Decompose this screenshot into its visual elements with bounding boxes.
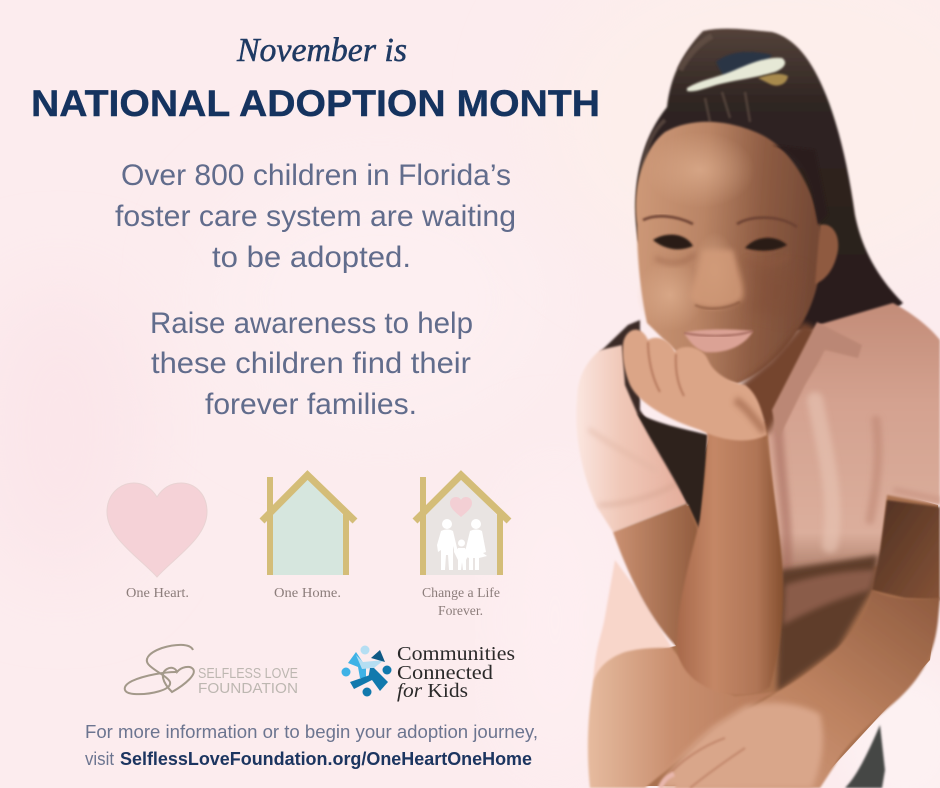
body underpaint: closes gaps between shapes (594, 420, 938, 786)
collar (772, 322, 862, 440)
hand under the chin (623, 330, 767, 440)
logo wordmark: SELFLESS LOVE (198, 665, 298, 682)
hand on knee (660, 703, 823, 788)
hair strands behind the left shoulder (600, 320, 700, 505)
face (636, 122, 822, 384)
eye: left (653, 235, 693, 249)
ear (815, 224, 838, 284)
text block: call to action: these children find their (151, 347, 471, 380)
hair highlight streaks (640, 36, 750, 190)
nose side shadow (745, 265, 805, 320)
footer: call to visit: visit (85, 749, 114, 769)
pearl hair clip (687, 58, 785, 91)
upper arm (613, 503, 702, 647)
under-eye shading (655, 254, 790, 265)
icon: one heart (107, 483, 207, 601)
hair scrunchie (716, 52, 772, 80)
footer: call to visit (85, 722, 538, 769)
fingers (664, 738, 745, 788)
logo: Communities Connected for Kids: for Kids (397, 680, 468, 702)
caption: change a life forever: Change a Life (422, 586, 500, 601)
logo mark: linked figures (342, 646, 392, 696)
shirt: lower left hem (593, 560, 672, 683)
icon: house with family (415, 475, 509, 619)
text block: call to action: Raise awareness to help (150, 307, 473, 340)
small heart (450, 497, 472, 517)
logo: Communities Connected for Kids (342, 643, 515, 702)
eyebrows (643, 216, 797, 227)
legs and knee (588, 648, 775, 788)
text block: call to action (150, 307, 473, 421)
shadow: waist beneath the arm (777, 555, 878, 692)
caption: one home: One Home. (274, 586, 341, 601)
logo: Communities Connected for Kids: Connected (397, 662, 493, 684)
chair (845, 725, 885, 788)
forearm (677, 430, 783, 695)
gold clip end (758, 74, 788, 86)
logo wordmark: Communities (397, 643, 515, 665)
photo: girl resting chin on hand (576, 29, 940, 788)
hair: ponytail and crown (635, 29, 903, 330)
website link: SelflessLoveFoundation.org/OneHeartOneHome (120, 749, 532, 769)
hair falling between arm and sleeve (637, 413, 708, 530)
finger creases (648, 342, 684, 396)
shirt: left sleeve (576, 345, 687, 532)
text block: statistic: Over 800 children in Florida’s (121, 159, 511, 192)
November is: November is (236, 32, 407, 69)
forehead and cheek highlights (645, 132, 755, 208)
shirt fold shading (590, 400, 940, 585)
text block: statistic (115, 159, 516, 274)
shirt: torso (765, 303, 940, 590)
logo mark: script S and heart (125, 645, 194, 694)
mouth (684, 329, 753, 352)
footer: call to visit: For more information or to begin your adoption journey, (85, 722, 538, 742)
family silhouettes (437, 519, 487, 570)
icon: one home (262, 475, 355, 601)
right forearm (675, 590, 940, 788)
baby hairs at temple (772, 145, 828, 225)
text block: call to action: forever families. (205, 388, 417, 421)
icon: house with family: Forever. (438, 604, 483, 619)
logo: Selfless Love Foundation (125, 645, 298, 697)
text block: statistic: to be adopted. (212, 241, 411, 274)
logo: Selfless Love Foundation: FOUNDATION (198, 680, 298, 697)
text block: statistic: foster care system are waiting (115, 200, 516, 233)
eye: right (745, 238, 787, 251)
nose (690, 250, 743, 308)
caption: one heart: One Heart. (126, 586, 189, 601)
chin shadow (740, 322, 820, 435)
title (31, 32, 600, 124)
right upper arm in shadow (872, 500, 940, 600)
National Adoption Month: NATIONAL ADOPTION MONTH (31, 83, 600, 124)
